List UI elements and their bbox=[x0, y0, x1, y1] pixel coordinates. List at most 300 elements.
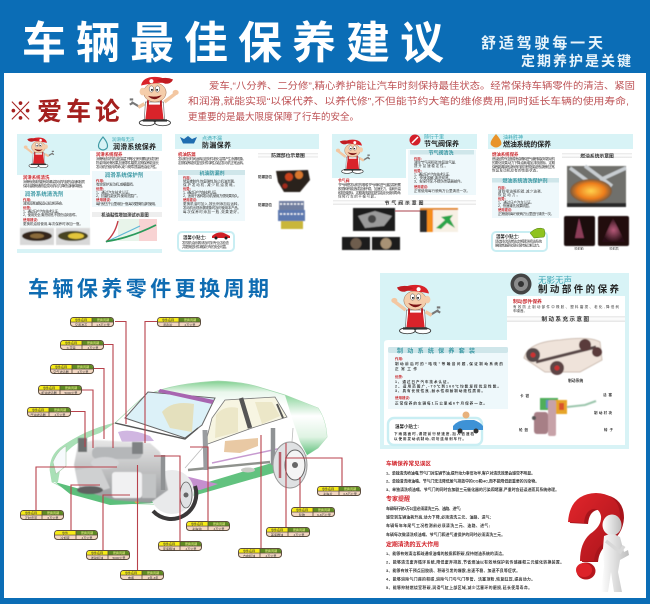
part label 1: 更换周期 bbox=[97, 317, 109, 322]
part label 14: 4万公里 bbox=[293, 532, 305, 537]
part label 16: 零件名称 bbox=[322, 486, 334, 491]
part label 10: 2年-3年 bbox=[148, 575, 158, 580]
product box: 使用建议: bbox=[183, 197, 197, 202]
headlight bbox=[53, 446, 66, 474]
part label 8: 更换周期 bbox=[81, 530, 93, 535]
intro text: 更重要的是最大限度保障了行车的安全。 bbox=[188, 111, 359, 123]
tip card: 以使用发动机制动,切勿连续刹车行。 bbox=[394, 436, 466, 441]
part label 14: 零件名称 bbox=[271, 527, 283, 532]
tip card: 温馨小贴士: bbox=[496, 233, 520, 240]
product box: 保护发动机,减少机油损耗。 bbox=[183, 182, 237, 187]
text block: 恢复发动机应有的性能状态。 bbox=[492, 168, 540, 172]
diagram header bbox=[333, 199, 476, 206]
heading: love car: ※爱车论 bbox=[8, 98, 120, 126]
panel: brake parts bbox=[380, 273, 629, 449]
part label 5: 汽油滤清器 bbox=[30, 412, 46, 417]
tip card bbox=[178, 232, 234, 251]
protection box: 2、抗磨性能优异,使用范围广。 bbox=[96, 193, 140, 198]
car body bbox=[50, 381, 327, 505]
windshield interior seats bbox=[162, 403, 194, 432]
diagram header: 防漏部位示意图 bbox=[271, 152, 305, 159]
part label 6: 零件名称 bbox=[162, 317, 174, 322]
protection box: 作用: bbox=[96, 178, 104, 183]
cleaner box: 作用: bbox=[23, 197, 31, 202]
leader lines bbox=[36, 322, 342, 570]
part label 10: 更换周期 bbox=[147, 570, 159, 575]
part label 6: 2万公里 bbox=[184, 322, 196, 327]
photo: throttle diagram bbox=[420, 208, 458, 232]
part label 4: 更换周期 bbox=[65, 385, 77, 390]
part label 3 bbox=[50, 364, 94, 374]
cleaner box: 提升怠速稳定性。 bbox=[414, 163, 448, 168]
icon: crown bbox=[180, 136, 197, 144]
hood green edge bbox=[50, 423, 115, 482]
panel: leak prevention bbox=[175, 134, 319, 251]
panel heading: 油耗胜神 bbox=[503, 134, 523, 141]
cleaner box: 正常使用每行驶两万公里进行清洗一次。 bbox=[498, 211, 554, 216]
label: leak point 1: 防漏部位 bbox=[258, 174, 272, 179]
product box: 优势: bbox=[183, 186, 191, 191]
cleaner box bbox=[408, 150, 476, 195]
protection box: 1、通过汽车技术认证。 bbox=[96, 190, 132, 194]
product box: 2、适用于各种发动机,使用方便效果持久。 bbox=[183, 193, 241, 198]
cleaner box: 清洗润滑油路,延长发动机寿命。 bbox=[23, 200, 65, 206]
diagram header: 节气阀示意图 bbox=[385, 199, 425, 206]
panel heading: 随行千里 bbox=[424, 134, 444, 140]
section: five benefits: 5、能够抑制燃烧室积碳,润滑气缸上部区域,减少活塞环的磨损,延长使用寿命。 bbox=[386, 585, 532, 590]
part label 9: 更换周期 bbox=[113, 550, 125, 555]
part label 13 bbox=[238, 548, 282, 558]
text block: brake parts: 制动部件保养 bbox=[513, 298, 542, 305]
cleaner box: 清除节气阀积碳,恢复进气量, bbox=[414, 160, 456, 164]
part label 13: 零件名称 bbox=[243, 548, 255, 553]
text block bbox=[338, 178, 402, 198]
icon: blue car bbox=[453, 412, 483, 434]
diagram header: 燃油系统示意图 bbox=[580, 152, 614, 160]
cleaner box: 优势: bbox=[498, 196, 506, 201]
part label 11: 变速箱油 bbox=[163, 546, 175, 551]
tip card: 温馨小贴士: bbox=[395, 423, 419, 430]
part label 13: 4万公里 bbox=[265, 553, 277, 558]
panel: fuel system bbox=[488, 134, 633, 251]
section: five benefits: 3、能够有效干预点因胶质、积碳引发的爆震,怠速不稳、加速不良等症状。 bbox=[386, 568, 520, 573]
icon: red question mark bbox=[568, 493, 624, 580]
text block: cleaning: 润滑系统清洗能有效清除发动机内部的油泥和胶质 bbox=[23, 179, 86, 184]
text block: 胶质和积碳,造成怠速不稳、加速无力、油耗升高 bbox=[338, 186, 402, 191]
protection box: 润滑系统保护剂 bbox=[105, 171, 144, 179]
part label 7: 6万公里 bbox=[47, 515, 59, 520]
brake set box: 1、通过日产汽车技术认证。 bbox=[395, 379, 451, 384]
section: five benefits: 4、能够消除气门座的积碳,消除气门与气门导管、活塞顶粉,恢复缸压,提高动力。 bbox=[386, 576, 535, 582]
text block: cleaning: 保持油路畅通,恢复发动机动力,降低油耗和噪音。 bbox=[23, 183, 85, 188]
brake set box: 正常保养的车辆每1万公里或6个月保养一次。 bbox=[395, 400, 487, 406]
cleaner box: 2、使用安全,清洗彻底,不损伤油封部件。 bbox=[23, 212, 79, 217]
section: expert advice bbox=[386, 495, 505, 537]
diagram labels: 活塞 bbox=[603, 392, 612, 397]
roof stripe bbox=[158, 389, 214, 404]
part label 12: 刹车油 bbox=[192, 526, 202, 531]
panel heading bbox=[112, 136, 156, 151]
part label 16: 更换周期 bbox=[344, 486, 356, 491]
panel heading: 燃油系统的保养 bbox=[503, 140, 551, 148]
part label 8: 冷却液 bbox=[60, 535, 70, 540]
part label 10 bbox=[120, 570, 164, 580]
diagram: car cutaway bbox=[50, 381, 327, 519]
photo: engine bbox=[353, 208, 395, 231]
diagram labels bbox=[519, 392, 614, 432]
section: expert advice: 专家提醒 bbox=[386, 495, 410, 503]
section: five benefits: 定期清洗的五大作用 bbox=[386, 540, 439, 548]
diagram labels: 轮毂 bbox=[519, 427, 528, 432]
diagram labels: 卡钳 bbox=[520, 393, 530, 398]
cleaner box: 1、通过日产汽车认证。 bbox=[498, 200, 534, 204]
engine bbox=[74, 438, 168, 503]
part label 2: 更换周期 bbox=[87, 340, 99, 345]
slogan: 舒适驾驶每一天 bbox=[481, 34, 603, 52]
icon: fuel drop bbox=[491, 134, 501, 148]
photos: throttle bodies bbox=[342, 237, 400, 250]
text block: 保养能清除燃油系统内部沉积物,保证燃油喷射正常, bbox=[492, 164, 555, 169]
part label 4: 5000公里 bbox=[64, 390, 78, 395]
part label 1: 1.5万公里 bbox=[96, 322, 110, 327]
cleaner box bbox=[492, 178, 559, 218]
part label 16 bbox=[318, 486, 360, 496]
cleaner box: 使用建议: bbox=[23, 217, 38, 222]
tip card: 发现机油渗漏,请及时到专业店检查 bbox=[182, 240, 230, 245]
panel heading bbox=[202, 135, 231, 150]
text block: 节气阀 bbox=[338, 178, 350, 183]
part label 15: 更换周期 bbox=[318, 507, 330, 512]
section: five benefits: 2、能够清洁废弃循环系统,降低废弃排放,节省燃油以有效地保护氧传感器和三元催化转换装置。 bbox=[386, 560, 564, 564]
part label 12 bbox=[186, 521, 230, 531]
protection box: 使用建议: bbox=[96, 197, 111, 202]
part label 15: 零件名称 bbox=[296, 507, 308, 512]
text block: cleaning bbox=[23, 174, 86, 188]
section: five benefits: 1、能够有效清洁和疏通喷油嘴的胶质和积碳,保持燃油系统的清洁。 bbox=[386, 551, 506, 556]
intro text bbox=[188, 80, 635, 123]
protection box bbox=[92, 171, 162, 207]
diagram labels: 制动衬块 bbox=[594, 410, 612, 415]
part label 11: 更换周期 bbox=[185, 541, 197, 546]
section heading: parts replacement cycle: 车辆保养零件更换周期 bbox=[28, 278, 269, 301]
captions: 喷射后 bbox=[609, 246, 619, 250]
brake set box: 3、具有长效性良,耐水性和耐制动液性质用。 bbox=[395, 388, 485, 393]
part label 1: 空调滤芯 bbox=[75, 322, 87, 327]
part label 14 bbox=[266, 527, 310, 537]
product box: 每次保养时添加一瓶,效果更好。 bbox=[183, 209, 241, 214]
part label 9 bbox=[86, 550, 130, 560]
part label 13: 更换周期 bbox=[265, 548, 277, 553]
cleaner box: 1、通过日产汽车技术认证。 bbox=[414, 172, 452, 176]
part label 4 bbox=[38, 385, 82, 395]
diagram header bbox=[507, 315, 625, 323]
brake set box: 使用建议: bbox=[395, 395, 410, 400]
section: common misconceptions bbox=[386, 460, 559, 492]
cleaner box: 使用建议: bbox=[414, 184, 428, 189]
tip card: 请选择优质燃油,定期清洗喷油系统 bbox=[495, 238, 542, 244]
door sill green bbox=[193, 462, 277, 496]
panel heading bbox=[424, 134, 459, 148]
text block: 燃油系统保养 bbox=[492, 151, 519, 158]
trunk green bbox=[285, 395, 327, 455]
panel heading: 润滑系统保养 bbox=[113, 142, 156, 151]
connector bbox=[395, 210, 421, 212]
part label 9: 发动机油 bbox=[91, 555, 103, 560]
section: common misconceptions: 车辆保养常见误区 bbox=[386, 460, 431, 468]
part label 11 bbox=[158, 541, 202, 551]
rear wheel bbox=[273, 442, 307, 488]
cleaner box: 优势: bbox=[414, 168, 422, 173]
tip card: 温馨小贴士: bbox=[183, 234, 207, 241]
panel heading bbox=[538, 275, 619, 296]
icon: throttle badge bbox=[410, 134, 420, 146]
section: common misconceptions: 1、单独清洗喷油嘴,节气门对车辆节油,提升动力事倍功半,客户对清洗效果会感觉不明显。 bbox=[386, 470, 535, 476]
icon: mascot bbox=[391, 285, 440, 334]
front wheel bbox=[150, 470, 196, 519]
icon: oil drop bbox=[98, 137, 108, 150]
brake set box: 正常工作 bbox=[395, 366, 417, 371]
part label 7: 更换周期 bbox=[47, 510, 59, 515]
panel heading: 点滴不漏 bbox=[202, 135, 222, 142]
label: leak point 2: 防漏部位 bbox=[258, 202, 272, 207]
part label 15 bbox=[292, 507, 334, 517]
part label 3: 空气滤清器 bbox=[53, 369, 69, 374]
part label 2: 零件名称 bbox=[65, 340, 77, 345]
cleaner box: 清除喷油嘴积碳,减少油耗, bbox=[498, 188, 542, 194]
section: expert advice: 感觉到车辆油耗升高,动力下降,必须清洗三元、油路、进气; bbox=[386, 514, 491, 520]
brake set box: 作用: bbox=[395, 356, 403, 361]
photo: engine bbox=[276, 170, 310, 192]
text block: right column: 物,影响润滑效果,加速零件磨损,定期保养能延长 bbox=[96, 160, 160, 165]
part label 6: 雨刮片 bbox=[163, 322, 173, 327]
part label 14: 更换周期 bbox=[293, 527, 305, 532]
part label 11: 零件名称 bbox=[163, 541, 175, 546]
protection box: 有效保护发动机,减缓磨损。 bbox=[96, 182, 136, 186]
diagram header bbox=[562, 152, 632, 160]
slogan bbox=[481, 34, 631, 69]
cleaner box: 恢复动力。 bbox=[498, 192, 520, 197]
icon: red car bbox=[212, 232, 230, 240]
brake set box bbox=[388, 347, 508, 409]
section: five benefits bbox=[386, 540, 564, 590]
panel heading: 防漏保养 bbox=[202, 140, 231, 150]
part label 11: 4万公里 bbox=[185, 546, 197, 551]
photos: engine parts bbox=[20, 228, 90, 245]
text block: 燃油品质不佳造成喷油嘴和进气道积碳,影响发动机 bbox=[492, 156, 556, 161]
cleaner box: 使用建议: bbox=[498, 207, 512, 212]
part label 10: 零件名称 bbox=[125, 570, 137, 575]
part label 5: 零件名称 bbox=[32, 407, 44, 412]
panel: throttle bbox=[332, 134, 477, 250]
icon: brake disc bbox=[510, 274, 532, 294]
part label 7: 正时皮带 bbox=[25, 515, 37, 520]
wiper line bbox=[115, 423, 198, 439]
part label 13: 方向机油 bbox=[243, 553, 255, 558]
part label 7: 零件名称 bbox=[25, 510, 37, 515]
caption: 制动系统 bbox=[568, 378, 583, 383]
icon: mascot bbox=[24, 138, 54, 168]
front strut bbox=[161, 455, 165, 490]
part label 9: 5000公里 bbox=[112, 555, 126, 560]
part label 12: 4万公里 bbox=[213, 526, 225, 531]
cleaner box: 3、安全环保,不损伤传感器部件。 bbox=[414, 178, 464, 184]
tip card: 并更换密封件,确保行车的安全可靠。 bbox=[182, 244, 229, 249]
side window interior bbox=[205, 397, 287, 445]
text block: 发动机长时间运转后密封件老化,容易产生渗漏现象。 bbox=[178, 156, 246, 161]
part label 3: 2万公里 bbox=[77, 369, 89, 374]
underbody rail bbox=[188, 462, 270, 470]
section: expert advice: 车辆每次做清洗喷油嘴、节气门和进气道保护的同时必须清洗三元。 bbox=[386, 532, 505, 537]
cleaner box: 1、通过日产汽车技术认证。 bbox=[23, 208, 61, 214]
section: expert advice: 车辆每行驶2万公里必须清洗三元、油路、进气; bbox=[386, 506, 461, 511]
intro text: 爱车,“八分养、二分修”,精心养护能让汽车时刻保持最佳状态。经常保持车辆零件的清洁、紧固 bbox=[209, 80, 635, 92]
part label 7 bbox=[20, 510, 64, 520]
chassis image bbox=[524, 338, 602, 375]
part label 12: 零件名称 bbox=[191, 521, 203, 526]
tip card: 确保燃油雾化良好,保持发动机动力。 bbox=[495, 242, 542, 248]
part label 9: 零件名称 bbox=[91, 550, 103, 555]
part label 16: 刹车片 bbox=[323, 491, 333, 496]
text block: 节气阀是发动机的咽喉,节气阀和进气道容易积累 bbox=[338, 182, 402, 187]
part label 1: 零件名称 bbox=[75, 317, 87, 322]
photo: gasket parts bbox=[278, 201, 305, 229]
text block: right column bbox=[96, 151, 160, 169]
brake diagram bbox=[532, 398, 596, 436]
section: common misconceptions: 3、单独清洗喷油嘴、节气门的同时会加剧三元催化器的污染和堵塞,严重时会延误进而其系统修理。 bbox=[386, 487, 559, 492]
text block: right column: 润滑系统中的机油在高温下氧化,日积月累后形成沉积 bbox=[96, 156, 160, 161]
panel heading bbox=[503, 134, 551, 148]
tip card bbox=[388, 412, 483, 445]
panel heading: 节气阀保养 bbox=[424, 139, 459, 148]
cleaner box: 2、快速清洗,效果明显。 bbox=[498, 203, 532, 208]
cleaner box: 2、快速溶解,清洗彻底。 bbox=[414, 175, 452, 180]
brake set box: 制动系统保养套装 bbox=[397, 347, 475, 355]
product box: 更换机油时加入,按比例添加后运转。 bbox=[183, 201, 241, 206]
purple floor and line bbox=[184, 476, 218, 490]
part label 3: 更换周期 bbox=[77, 364, 89, 369]
product box: 发动机出现渗漏现象时及时使用本产品。 bbox=[183, 205, 241, 210]
slogan: 定期养护是关键 bbox=[521, 53, 631, 69]
cleaner box: 作用: bbox=[414, 156, 422, 161]
brake set box: 制动前后时的“咯吱”等噪音问题,保证制动系统的 bbox=[395, 361, 503, 366]
part label 2 bbox=[60, 340, 104, 350]
bumper stripe bbox=[55, 482, 155, 505]
text block: brake parts: 车噪音。 bbox=[513, 308, 527, 313]
part label 6 bbox=[158, 317, 200, 327]
text block: cleaning: 润滑系统清洗 bbox=[23, 174, 50, 181]
part label 8 bbox=[54, 530, 98, 540]
title: 车辆最佳保养建议 bbox=[22, 19, 444, 68]
protection box: 每行驶五千公里添加一瓶,每次更换机油时使用。 bbox=[96, 201, 158, 206]
chart: oil viscosity: 机油黏性增加测试示意图 bbox=[101, 211, 149, 218]
cleaner box: 正常使用每行驶两万公里清洗一次。 bbox=[414, 188, 470, 193]
icon: mascot bbox=[336, 140, 370, 173]
protection box: 优势: bbox=[96, 186, 104, 191]
text block bbox=[492, 151, 556, 172]
floor beige seat bbox=[224, 438, 258, 453]
captions bbox=[574, 246, 619, 250]
cleaner box: 润滑系统清洗剂 bbox=[25, 190, 64, 198]
photos: spray bbox=[564, 216, 629, 246]
product box bbox=[178, 170, 245, 221]
part label 3: 零件名称 bbox=[55, 364, 67, 369]
part label 10: 电瓶 bbox=[128, 575, 134, 580]
product box: 修复橡胶件,恢复弹性,防止机油渗漏。 bbox=[183, 178, 237, 184]
panel: lubrication system bbox=[17, 134, 162, 253]
text block: right column: 发动机的使用寿命,减少故障,提高燃油经济性。 bbox=[96, 164, 159, 169]
text block: 机油防漏 bbox=[178, 151, 196, 158]
part label 12: 更换周期 bbox=[213, 521, 225, 526]
text block: brake parts bbox=[513, 298, 620, 313]
brake set box: 2、适用范围广,-70℃到160℃均能发挥优异性能。 bbox=[395, 384, 501, 388]
part label 16: 3-5万公里 bbox=[343, 491, 357, 496]
text block bbox=[178, 151, 246, 165]
diagram labels: 转子 bbox=[604, 427, 614, 432]
icon: white thinking figure bbox=[601, 514, 629, 592]
cleaner box: 燃油系统清洗保护剂 bbox=[502, 178, 548, 184]
part label 6: 更换周期 bbox=[184, 317, 196, 322]
tip card: 下雨路面时,请提前行驶速度,加入低速档 bbox=[394, 431, 474, 436]
cleaner box: 作用: bbox=[498, 185, 506, 190]
product box: 机油防漏剂 bbox=[199, 170, 225, 177]
door panel line bbox=[185, 428, 293, 468]
part label 2: 火花塞 bbox=[66, 345, 76, 350]
icon: green car bbox=[530, 228, 545, 238]
captions: 喷射前 bbox=[574, 246, 584, 250]
part label 5 bbox=[28, 407, 70, 417]
product box: 1、通过日产汽车技术认证。 bbox=[183, 190, 219, 194]
text block: 的雾化效果,动力下降,油耗增加,排放超标。定期 bbox=[492, 160, 556, 165]
cleaner box bbox=[20, 190, 90, 228]
text block: brake parts: 有效防止制动部件中橡胶、塑料磨损、老化,降低刹 bbox=[513, 304, 620, 309]
section: expert advice: 车辆每年年尾气工况检测前必须清洗三元、油路、进气; bbox=[386, 523, 490, 528]
brake set box: 优势: bbox=[395, 374, 403, 379]
panel heading: 制动部件的保养 bbox=[538, 284, 619, 296]
text block: right column: 润滑系统保养 bbox=[96, 151, 123, 158]
cleaner box: 更换机油前使用,每次保养时添加一瓶。 bbox=[23, 221, 83, 226]
text block: 定期保养能恢复密封件弹性,保证发动机正常运转。 bbox=[178, 160, 246, 165]
icon: mascot bbox=[130, 77, 179, 126]
part label 14: 差速器油 bbox=[271, 532, 283, 537]
part label 1 bbox=[70, 317, 114, 327]
tip card bbox=[492, 228, 547, 251]
part label 8: 4万公里 bbox=[81, 535, 93, 540]
part label 4: 零件名称 bbox=[43, 385, 55, 390]
cleaner box: 节气阀清洗 bbox=[428, 150, 454, 156]
text block: 和排放超标。定期清洗能恢复性能,延长使用寿命, bbox=[338, 190, 401, 195]
part label 15: 轮胎 bbox=[299, 512, 305, 517]
part label 5: 更换周期 bbox=[54, 407, 66, 412]
cleaner box: 优势: bbox=[23, 205, 31, 210]
panel heading: 无影无声 bbox=[538, 275, 572, 285]
section: common misconceptions: 2、单独清洗喷油嘴、节气门无法降低尾气排放中的CO和HC,而不能降低最重要的污染物。 bbox=[386, 478, 539, 484]
part label 2: 4万公里 bbox=[87, 345, 99, 350]
part label 4: 机油滤清器 bbox=[41, 390, 57, 395]
photo: combustion bbox=[567, 166, 626, 207]
washer tank purple bbox=[118, 431, 154, 442]
intro text: 和润滑,就能实现“以保代养、以养代修”,不但能节约大笔的维修费用,同时延长车辆的使用寿命, bbox=[188, 96, 629, 108]
windshield bbox=[125, 392, 215, 438]
text block: 保障行车的平稳可靠。 bbox=[338, 194, 378, 198]
rear strut bbox=[271, 428, 275, 465]
part label 8: 零件 bbox=[62, 530, 68, 535]
part label 5: 4万公里 bbox=[54, 412, 66, 417]
chart: oil viscosity bbox=[92, 211, 162, 242]
product box: 作用: bbox=[183, 175, 191, 180]
diagram header bbox=[258, 152, 318, 159]
diagram header: 制动系充示意图 bbox=[541, 315, 591, 323]
part label 15: 6-8万公里 bbox=[317, 512, 331, 517]
